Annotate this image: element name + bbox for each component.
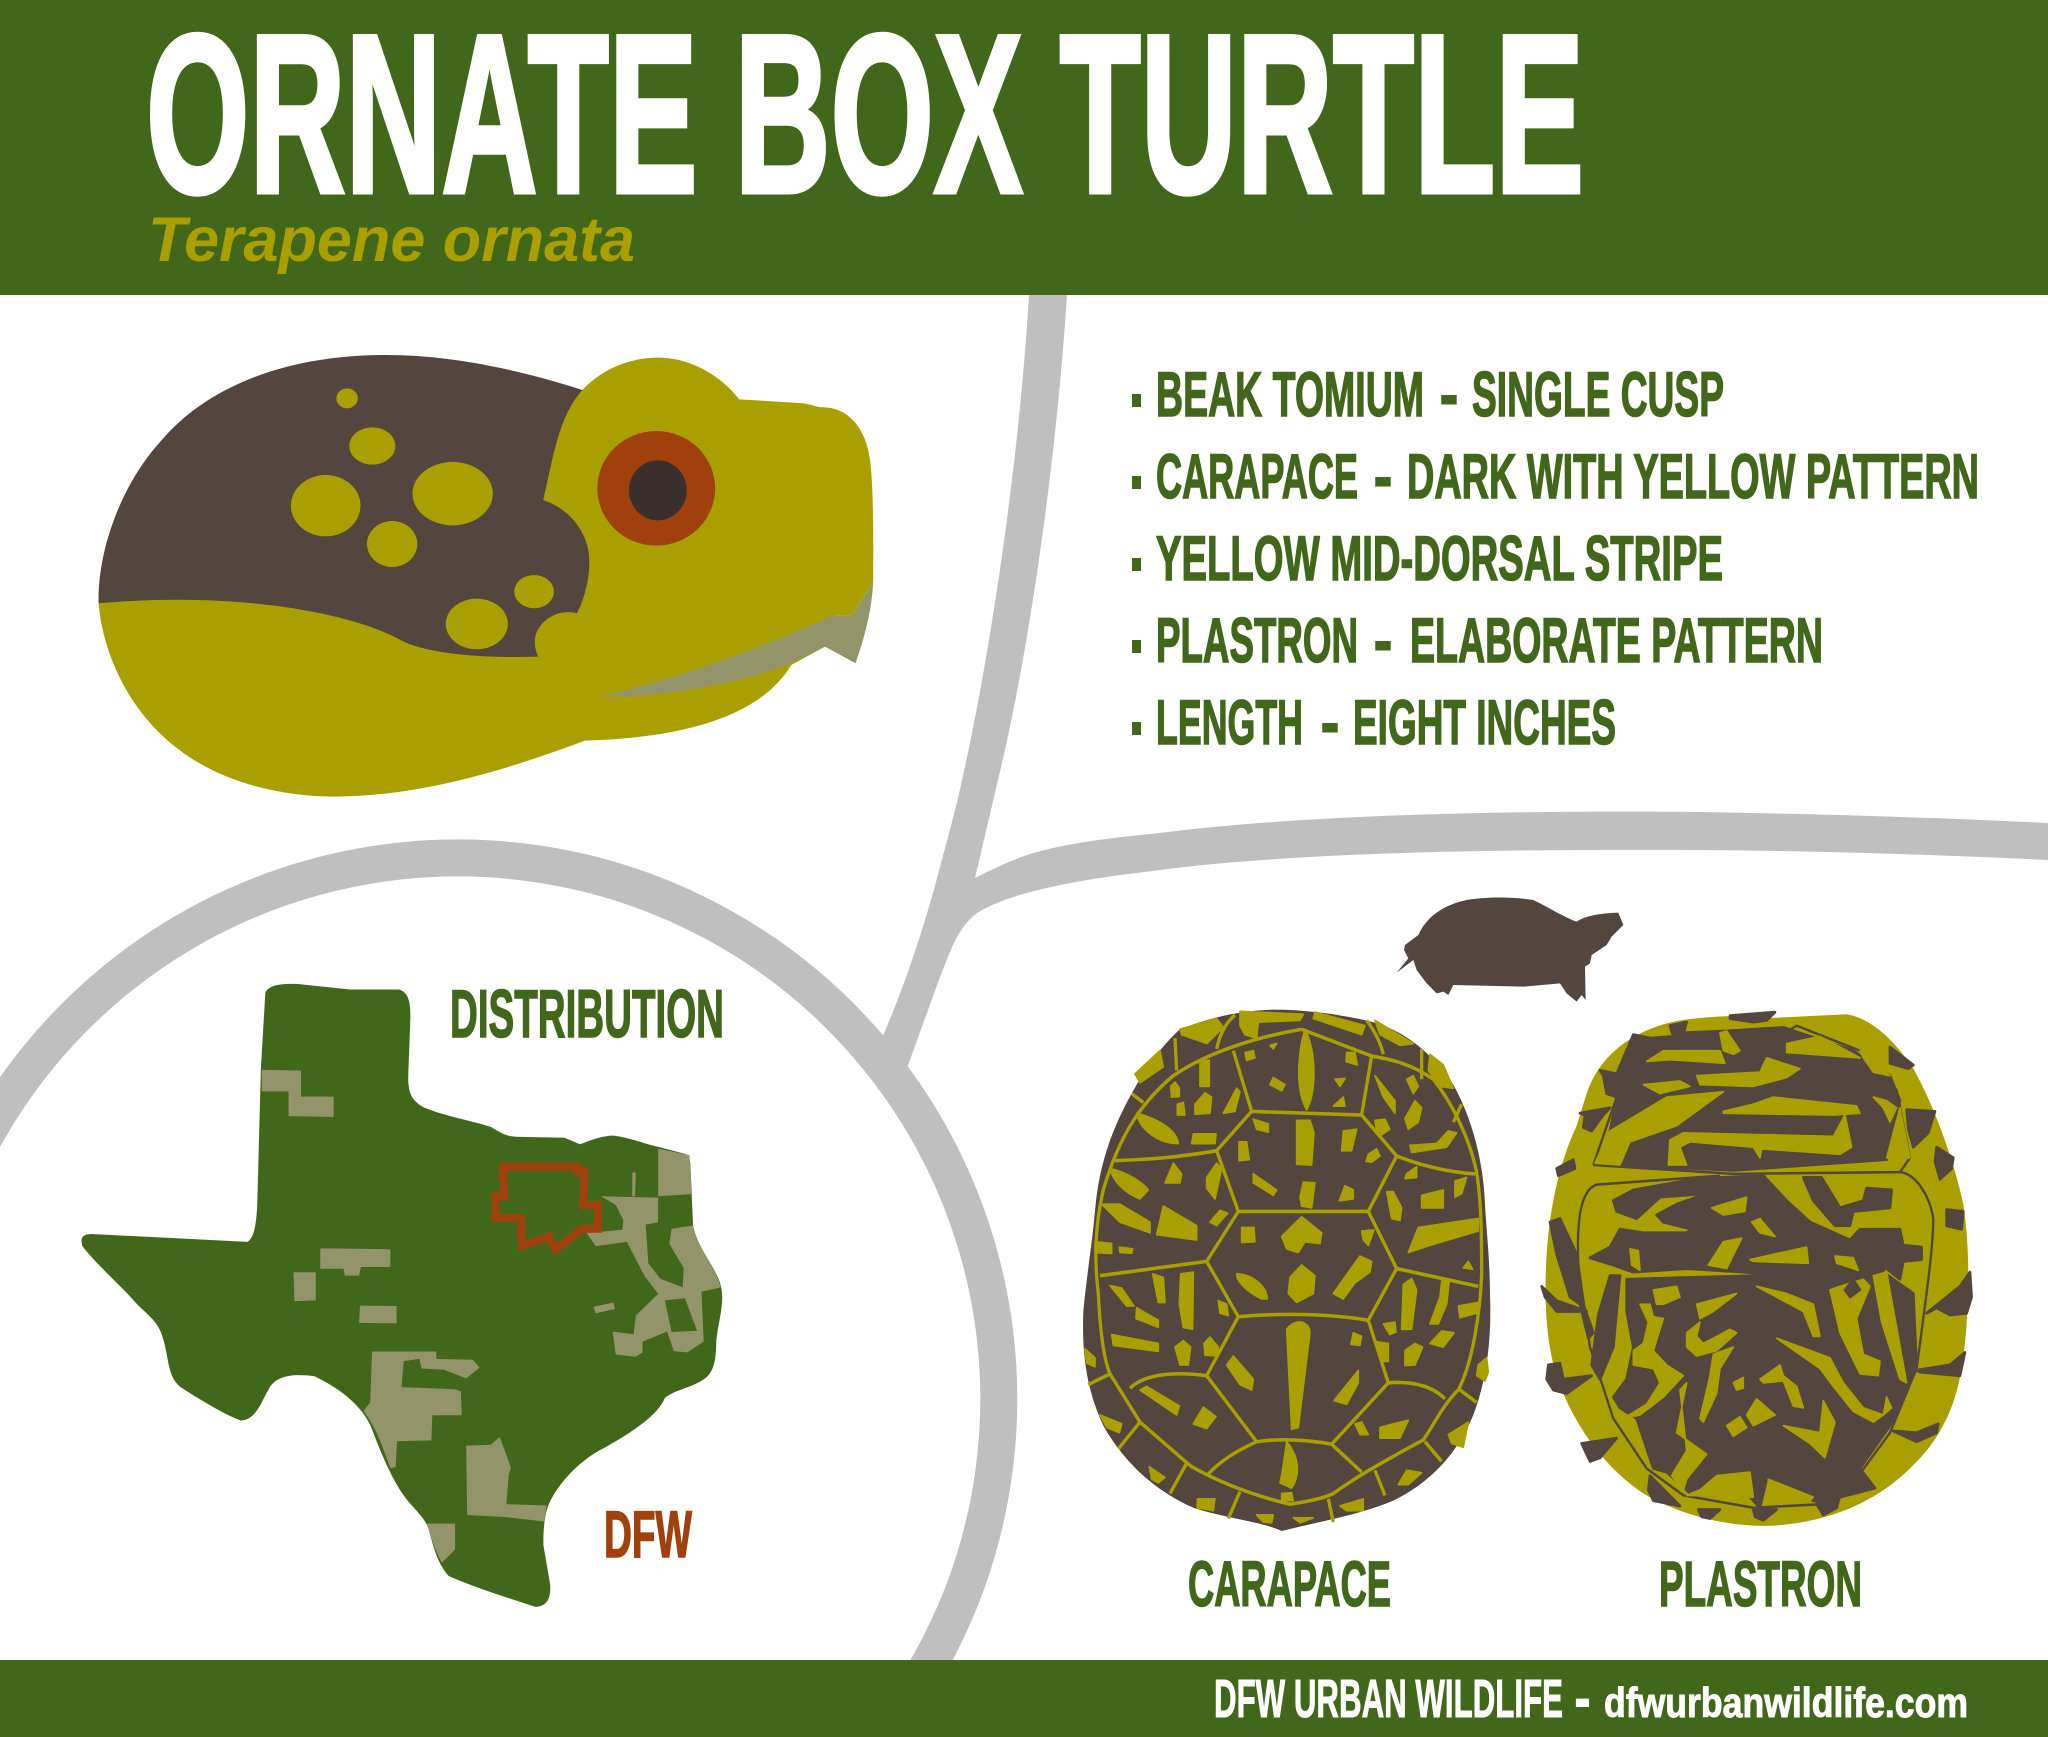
- facts list: SINGLE CUSP: [1472, 360, 1724, 430]
- grey panel dividers: [882, 295, 2048, 1068]
- label: distribution: DISTRIBUTION: [450, 976, 724, 1052]
- facts list: [1132, 360, 1979, 758]
- facts list: EIGHT INCHES: [1353, 688, 1616, 758]
- facts list: PLASTRON: [1156, 606, 1358, 676]
- icon: turtle silhouette: [1397, 897, 1623, 1002]
- footer credit: -: [1575, 1669, 1590, 1729]
- label: DFW: DFW: [604, 1497, 692, 1571]
- facts list: -: [1440, 360, 1458, 430]
- facts list: -: [1374, 442, 1392, 512]
- facts list: LENGTH: [1156, 688, 1303, 758]
- facts list: -: [1374, 606, 1392, 676]
- facts list: CARAPACE: [1156, 442, 1358, 512]
- label: plastron: PLASTRON: [1659, 1548, 1862, 1620]
- footer band: [0, 1660, 2048, 1737]
- grey ring around distribution panel: [0, 858, 999, 1670]
- footer credit: dfwurbanwildlife.com: [1604, 1679, 1968, 1726]
- illustration: carapace: [1083, 1010, 1490, 1531]
- footer credit: DFW URBAN WILDLIFE: [1214, 1669, 1563, 1729]
- header band: [0, 0, 2048, 295]
- subtitle: scientific name: Terapene ornata: [148, 205, 635, 275]
- facts list: BEAK TOMIUM: [1156, 360, 1424, 430]
- illustration: plastron: [1542, 1012, 1972, 1526]
- map: Texas distribution: [82, 984, 722, 1607]
- illustration: turtle head: [99, 355, 873, 797]
- label: carapace: CARAPACE: [1188, 1548, 1391, 1620]
- facts list: -: [1321, 688, 1339, 758]
